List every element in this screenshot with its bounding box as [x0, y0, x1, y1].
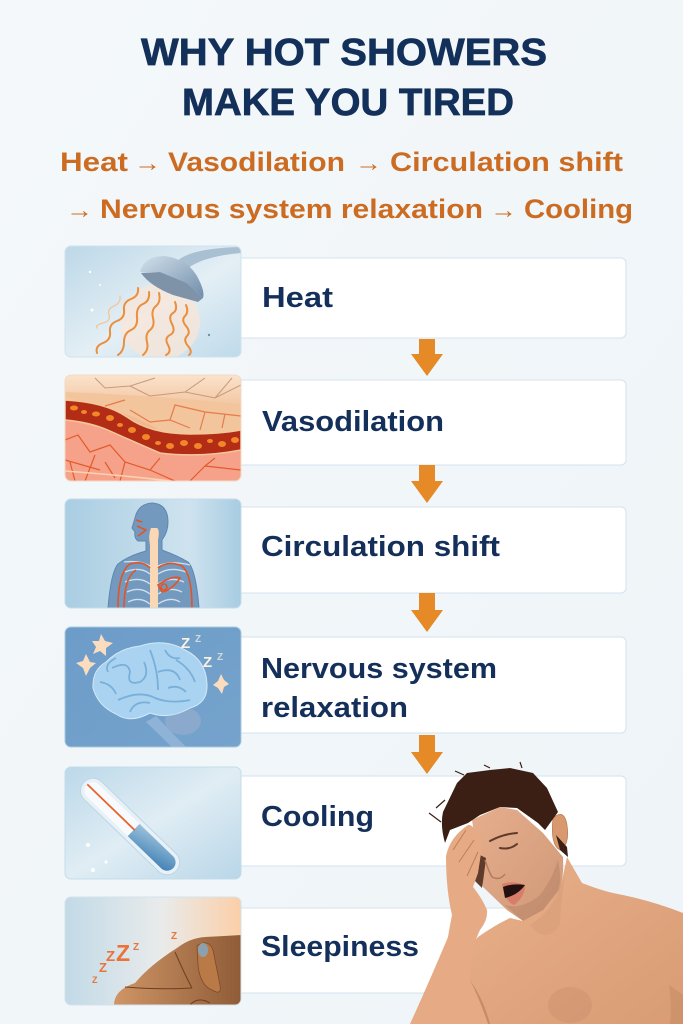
ear: [552, 814, 568, 850]
label: heat: Heat: [262, 282, 333, 314]
sleep letters: Z: [92, 975, 98, 985]
label: nervous system relaxation: [261, 653, 497, 724]
stars: [76, 634, 229, 694]
arrow 1: [411, 339, 443, 376]
sleep letters: Z: [116, 940, 130, 966]
stubble: [505, 860, 560, 921]
step 6: sleepiness: [64, 896, 522, 1006]
step 2: vasodilation: [65, 375, 626, 481]
label: circulation shift: Circulation shift: [261, 531, 500, 563]
card: circulation shift: [230, 507, 626, 593]
label: cooling: Cooling: [261, 801, 374, 833]
chest hair shade: [548, 987, 592, 1023]
label: sleepiness: Sleepiness: [261, 931, 419, 963]
label: vasodilation: Vasodilation: [262, 406, 444, 438]
card: vasodilation: [230, 380, 626, 465]
hair: [442, 768, 568, 857]
mouth: [502, 882, 525, 905]
subtitle: process chain: Heat: [60, 147, 128, 177]
finger lines: [453, 830, 478, 876]
subtitle: process chain: Nervous system relaxation: [100, 194, 483, 224]
title: [141, 32, 547, 124]
card: heat: [230, 258, 626, 338]
illustration: shower head with heat waves: [65, 246, 241, 360]
sleep letters: [181, 635, 223, 667]
hand and arm: [410, 825, 488, 1024]
step 4: nervous system relaxation: [65, 627, 626, 747]
title: MAKE YOU TIRED: [182, 82, 514, 124]
label: nervous system relaxation: relaxation: [261, 692, 408, 724]
card: cooling: [230, 776, 626, 866]
image border: [65, 627, 241, 747]
subtitle: process chain: →: [490, 197, 517, 224]
sleep letters: Z: [106, 948, 115, 965]
face: [472, 807, 563, 921]
subtitle: process chain: Cooling: [524, 194, 633, 224]
image border: [65, 246, 241, 357]
sleep letters: Z: [203, 654, 212, 671]
arrow 2: [411, 465, 443, 503]
subtitle: process chain: →: [134, 150, 161, 177]
sleep letters: Z: [195, 634, 201, 645]
sleep letters: Z: [171, 931, 177, 942]
sleep letters: Z: [181, 635, 190, 652]
illustration: relaxed brain with stars: [65, 627, 241, 747]
subtitle: process chain: →: [355, 150, 382, 177]
image border: [65, 499, 241, 608]
label: nervous system relaxation: Nervous system: [261, 653, 497, 685]
eyebrow and closed eye: [490, 833, 517, 848]
photo: tired man holding forehead: [410, 762, 683, 1024]
card: nervous system relaxation: [230, 637, 626, 733]
arrow 3: [411, 593, 443, 632]
hand shadow on face: [474, 855, 486, 888]
arrow 4: [411, 735, 443, 774]
card: sleepiness: [230, 908, 626, 993]
neck shading: [530, 875, 565, 935]
step 1: heat: [65, 246, 626, 360]
illustration: resting hand with sleep letters: [65, 897, 241, 1005]
image border: [65, 375, 241, 481]
illustration: body with circulation: [65, 499, 241, 608]
subtitle: process chain: →: [66, 197, 93, 224]
sleep letters: Z: [217, 652, 223, 663]
illustration: dilated blood vessel: [65, 375, 241, 481]
arm shadow: [468, 980, 490, 1024]
sleep letters: Z: [99, 960, 107, 975]
subtitle: process chain: [60, 147, 633, 224]
title: WHY HOT SHOWERS: [141, 32, 547, 74]
sleep letters: Z: [133, 942, 139, 953]
subtitle: process chain: Vasodilation: [168, 147, 345, 177]
torso and neck: [460, 857, 683, 1024]
step 3: circulation shift: [65, 499, 626, 608]
step 5: cooling: [65, 767, 626, 880]
illustration: thermometer: [65, 767, 241, 880]
subtitle: process chain: Circulation shift: [390, 147, 623, 177]
nose: [485, 860, 505, 878]
image border: [65, 767, 241, 879]
sleep letters: [92, 931, 177, 985]
image border: [65, 897, 241, 1005]
